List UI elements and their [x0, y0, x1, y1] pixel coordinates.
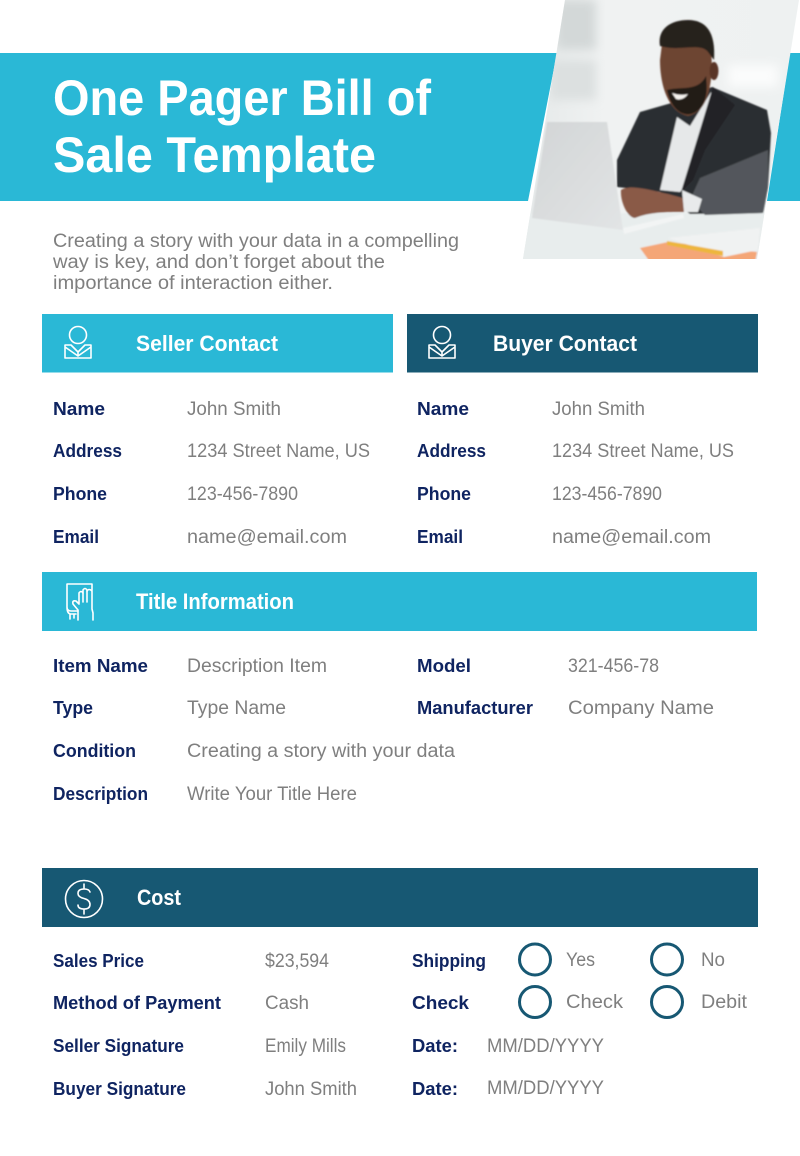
buyer contact fields: Name	[417, 399, 469, 419]
shipping and check options: No	[701, 950, 725, 971]
icon: hand on book	[67, 584, 93, 620]
title information fields: Type Name	[187, 698, 286, 719]
buyer contact fields: 1234 Street Name, US	[552, 441, 734, 462]
panel: seller contact header	[42, 314, 393, 372]
seller contact fields: name@email.com	[187, 527, 347, 548]
icon: dollar in circle	[66, 880, 102, 918]
panel: title information header	[42, 572, 757, 631]
seller contact fields: Address	[53, 441, 122, 461]
seller contact fields	[53, 399, 370, 548]
title information fields: Description Item	[187, 656, 327, 677]
signature dates: MM/DD/YYYY	[487, 1036, 604, 1057]
hand	[621, 187, 690, 218]
title information fields: 321-456-78	[568, 656, 659, 677]
title information fields: Write Your Title Here	[187, 784, 357, 805]
cost fields: $23,594	[265, 951, 329, 972]
neck and face	[660, 42, 712, 116]
shipping and check options: Shipping	[412, 951, 486, 971]
cost fields: Sales Price	[53, 951, 144, 971]
shipping and check options	[412, 944, 748, 1018]
title information fields: Manufacturer	[417, 698, 533, 718]
seller contact fields: Email	[53, 527, 99, 547]
buyer contact fields: John Smith	[552, 399, 645, 420]
title information fields: Company Name	[568, 698, 714, 719]
seller contact fields: Name	[53, 399, 105, 419]
title: One Pager Bill of	[53, 70, 431, 126]
panel: cost header: Cost	[137, 885, 182, 910]
shirt	[660, 92, 714, 192]
buyer contact fields: 123-456-7890	[552, 484, 662, 505]
panel: title information header: Title Information	[136, 589, 294, 614]
jacket	[617, 87, 771, 214]
intro text: way is key, and don’t forget about the	[52, 252, 385, 273]
hair	[660, 20, 714, 60]
signature dates: Date:	[412, 1036, 458, 1056]
seller contact fields: Phone	[53, 484, 107, 504]
cost fields: Method of Payment	[53, 993, 221, 1013]
cost fields: Seller Signature	[53, 1036, 184, 1056]
icon: buyer person	[429, 326, 455, 358]
panel: buyer contact header: Buyer Contact	[493, 331, 638, 356]
title: Sale Template	[53, 127, 376, 183]
title information fields: Description	[53, 784, 148, 804]
panel: cost header	[42, 868, 758, 927]
buyer contact fields: name@email.com	[552, 527, 711, 548]
title information fields: Type	[53, 698, 93, 718]
buyer contact fields	[417, 399, 734, 548]
intro text: Creating a story with your data in a compelling	[53, 231, 459, 252]
title	[53, 70, 431, 183]
shipping and check options: Yes	[566, 950, 595, 971]
title information fields: Condition	[53, 741, 136, 761]
shipping and check options: Check	[566, 992, 624, 1013]
beard	[667, 76, 707, 114]
signature dates: Date:	[412, 1079, 458, 1099]
title information fields	[53, 656, 714, 805]
seller contact fields: 123-456-7890	[187, 484, 298, 505]
shipping and check options: Check	[412, 993, 470, 1013]
buyer contact fields: Address	[417, 441, 486, 461]
notebook and pencil	[640, 242, 758, 259]
laptop	[532, 122, 623, 230]
buyer contact fields: Phone	[417, 484, 471, 504]
icon: seller person	[65, 326, 91, 358]
cost fields: John Smith	[265, 1079, 357, 1100]
signature dates: MM/DD/YYYY	[487, 1078, 604, 1099]
signature dates	[412, 1036, 604, 1099]
title information fields: Creating a story with your data	[187, 741, 455, 762]
seller contact fields: 1234 Street Name, US	[187, 441, 370, 462]
seller contact fields: John Smith	[187, 399, 281, 420]
header band	[0, 53, 800, 201]
photo: man working on a laptop	[520, 0, 800, 265]
table	[626, 212, 764, 258]
buyer contact fields: Email	[417, 527, 463, 547]
lapel	[681, 87, 735, 192]
cost fields: Emily Mills	[265, 1036, 346, 1057]
panel: seller contact header: Seller Contact	[136, 331, 279, 356]
panel: buyer contact header	[407, 314, 758, 372]
cost fields	[53, 951, 357, 1100]
cost fields: Buyer Signature	[53, 1079, 186, 1099]
intro text: importance of interaction either.	[53, 273, 333, 294]
shipping and check options: Debit	[701, 992, 748, 1013]
title information fields: Item Name	[53, 656, 148, 676]
intro text	[52, 231, 459, 294]
cost fields: Cash	[265, 993, 309, 1014]
title information fields: Model	[417, 656, 471, 676]
